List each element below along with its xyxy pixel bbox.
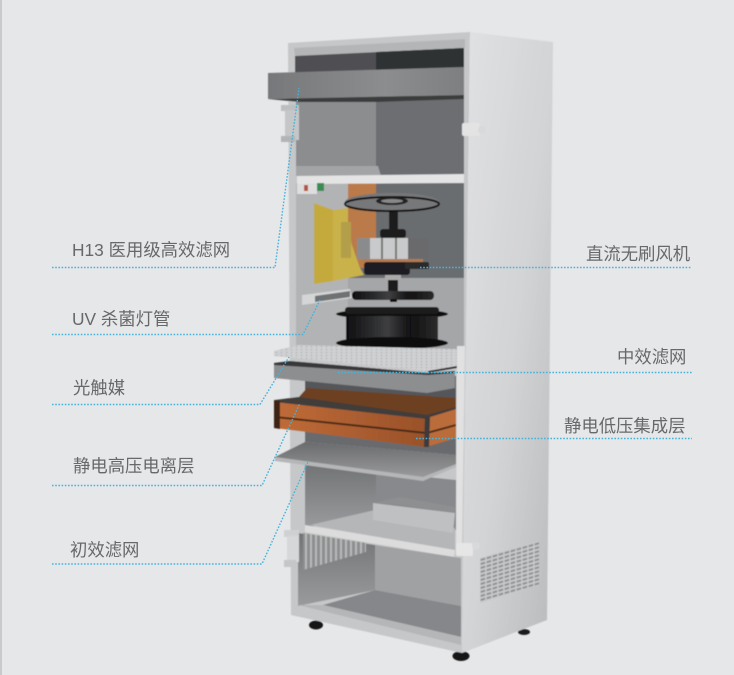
leader: H13	[52, 88, 299, 268]
labels	[70, 240, 690, 560]
label: H13 filter: H13 医用级高效滤网	[72, 240, 230, 260]
chamber behind collector	[305, 425, 456, 462]
right latch lower	[456, 542, 480, 556]
cabinet illustration	[268, 32, 553, 661]
electrostatic collector	[274, 388, 456, 447]
leader: motor	[420, 266, 692, 268]
shelf with switch	[297, 174, 464, 194]
label: brushless motor: 直流无刷风机	[586, 244, 690, 264]
top interior	[294, 39, 465, 75]
leader: primary filter	[52, 462, 308, 564]
label: photocatalyst: 光触媒	[73, 378, 125, 398]
right vent	[480, 541, 539, 603]
label: primary filter: 初效滤网	[70, 540, 139, 560]
fan wheel	[336, 307, 448, 355]
cabinet feet	[309, 620, 530, 661]
leader lines	[52, 88, 692, 564]
leader: UV	[52, 300, 320, 334]
leader: medium filter	[338, 372, 692, 374]
leader: photocatalyst	[52, 357, 289, 404]
leader: ioniser	[52, 403, 300, 486]
label: low-voltage collector: 静电低压集成层	[564, 416, 685, 436]
tray box	[373, 497, 455, 533]
fan chamber	[296, 183, 464, 353]
upper chamber	[296, 96, 464, 176]
H13 filter	[268, 67, 464, 102]
label: high-voltage ioniser: 静电高压电离层	[73, 456, 194, 476]
cabinet side panel	[462, 32, 553, 653]
left hinge upper	[281, 105, 299, 142]
yellow power box	[314, 203, 364, 284]
initial filter	[275, 442, 456, 481]
right latch upper	[462, 123, 486, 136]
medium filter	[274, 361, 456, 412]
label: medium filter: 中效滤网	[617, 347, 686, 367]
lower chamber	[305, 465, 456, 550]
left edge strip	[0, 0, 2, 675]
label: UV lamp: UV 杀菌灯管	[72, 309, 170, 329]
door edge strip	[456, 346, 465, 552]
brushless motor	[345, 193, 439, 302]
UV lamp	[302, 289, 352, 305]
left hinge lower	[284, 530, 299, 567]
left vent	[303, 533, 366, 570]
lower shelf	[305, 525, 455, 557]
leader: collector	[416, 438, 692, 440]
perforated panel	[274, 345, 457, 373]
cabinet front frame	[288, 32, 470, 653]
bottom chamber	[298, 533, 461, 645]
